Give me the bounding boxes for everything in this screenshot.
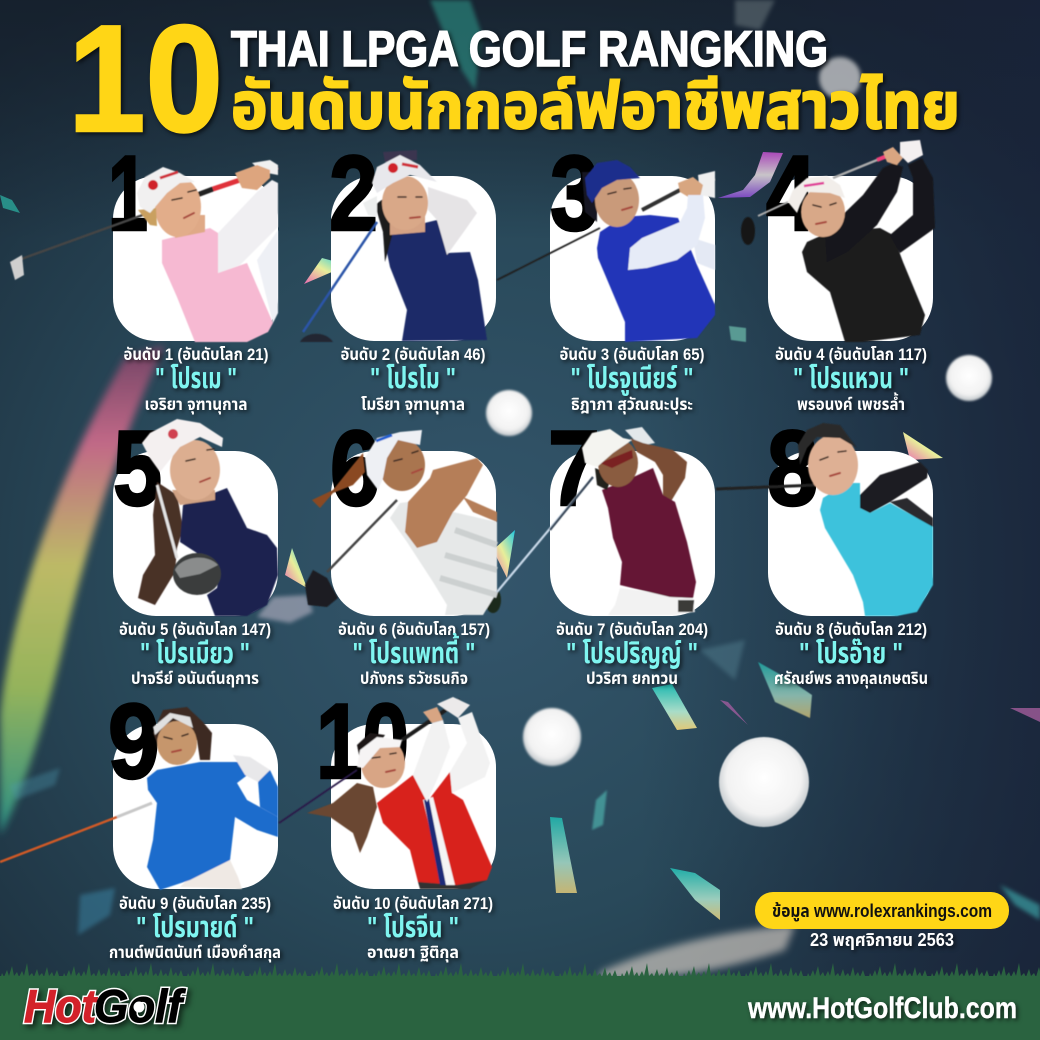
rank number: 5 bbox=[113, 408, 162, 528]
title bbox=[68, 0, 960, 164]
panel: player 9 bbox=[0, 681, 278, 890]
photo card bbox=[113, 176, 278, 341]
text: player 10: " โปรจีน " bbox=[367, 912, 459, 944]
rank number: 8 bbox=[767, 408, 818, 528]
logo: HotGolf: Golf bbox=[94, 980, 186, 1032]
text: player 1: อันดับ 1 (อันดับโลก 21) bbox=[124, 345, 268, 364]
rank number: 9 bbox=[108, 681, 160, 801]
panel: player 5 bbox=[113, 408, 278, 616]
text: player 9: อันดับ 9 (อันดับโลก 235) bbox=[119, 894, 271, 913]
text: player 3: อันดับ 3 (อันดับโลก 65) bbox=[560, 345, 704, 364]
rank number: 7 bbox=[548, 408, 600, 528]
text: player 2: โมรียา จุฑานุกาล bbox=[361, 395, 465, 415]
photo card bbox=[331, 176, 496, 341]
text: player 7: " โปรปริญญ์ " bbox=[566, 638, 698, 670]
text: player 1: เอริยา จุฑานุกาล bbox=[144, 395, 248, 415]
player figure bbox=[0, 707, 278, 890]
text: player 2 bbox=[340, 345, 486, 415]
logo: HotGolf: Hot bbox=[24, 980, 98, 1032]
text: player 5 bbox=[119, 620, 271, 688]
text: player 5: " โปรเมียว " bbox=[140, 638, 250, 670]
grass footer bbox=[0, 958, 1040, 1040]
logo: HotGolf: Hot bbox=[24, 980, 98, 1032]
player figure bbox=[497, 160, 715, 342]
player figure bbox=[741, 140, 935, 342]
text: player 7: อันดับ 7 (อันดับโลก 204) bbox=[556, 620, 708, 639]
panel: player 7 bbox=[497, 408, 715, 616]
golf balls bbox=[486, 57, 992, 827]
logo: HotGolf: Golf bbox=[94, 980, 186, 1032]
text: player 4: " โปรแหวน " bbox=[793, 363, 909, 395]
date: 23 พฤศจิกายน 2563 bbox=[810, 930, 954, 950]
photo card bbox=[331, 724, 496, 889]
photo card bbox=[768, 176, 933, 341]
text: player 1: " โปรเม " bbox=[155, 363, 237, 395]
text: player 5: อันดับ 5 (อันดับโลก 147) bbox=[119, 620, 271, 639]
english heading: THAI LPGA GOLF RANGKING bbox=[231, 21, 828, 77]
text: player 6: ปภังกร ธวัชธนกิจ bbox=[360, 669, 468, 688]
text: player 9 bbox=[109, 894, 281, 963]
rank number: 6 bbox=[330, 408, 380, 528]
photo card bbox=[331, 451, 496, 616]
text: player 3: " โปรจูเนียร์ " bbox=[570, 363, 694, 396]
source text: ข้อมูล www.rolexrankings.com bbox=[772, 901, 992, 922]
panel: player 1 bbox=[10, 133, 278, 342]
text: player 7 bbox=[556, 620, 708, 688]
text: player 9: กานต์พนิตนันท์ เมืองคำสกุล bbox=[109, 943, 281, 963]
text: player 5: ปาจรีย์ อนันต์นฤการ bbox=[131, 669, 259, 688]
player figure bbox=[305, 430, 501, 615]
photo card bbox=[113, 451, 278, 616]
yellow pill bbox=[755, 892, 1009, 929]
text: player 4 bbox=[775, 345, 927, 414]
panel: player 2 bbox=[300, 133, 496, 342]
panel: player 10 bbox=[279, 681, 496, 889]
text: player 3 bbox=[560, 345, 704, 415]
text: player 6: อันดับ 6 (อันดับโลก 157) bbox=[338, 620, 490, 639]
photo card bbox=[768, 451, 933, 616]
text: player 3: ธิฎาภา สุวัณณะปุระ bbox=[571, 395, 693, 415]
text: player 10: อันดับ 10 (อันดับโลก 271) bbox=[333, 894, 493, 913]
player figure bbox=[716, 423, 933, 616]
light flare bbox=[600, 925, 795, 980]
text: player 9: " โปรมายด์ " bbox=[136, 912, 254, 944]
panel: player 4 bbox=[741, 133, 935, 342]
text: player 6 bbox=[338, 620, 490, 688]
panel: player 6 bbox=[305, 408, 501, 616]
text: player 8: อันดับ 8 (อันดับโลก 212) bbox=[775, 620, 927, 639]
photo card bbox=[550, 451, 715, 616]
rank number: 4 bbox=[766, 133, 816, 253]
text: player 10 bbox=[333, 894, 493, 963]
text: player 2: อันดับ 2 (อันดับโลก 46) bbox=[340, 345, 486, 364]
photo card bbox=[113, 724, 278, 889]
rainbow streak bbox=[0, 345, 165, 835]
player figure bbox=[497, 427, 696, 615]
player figure bbox=[279, 697, 492, 889]
text: player 4: พรอนงค์ เพชรล้ำ bbox=[797, 392, 905, 414]
panel: player 3 bbox=[497, 133, 715, 342]
text: player 8: " โปรอ๊าย " bbox=[799, 638, 903, 670]
source callout bbox=[755, 892, 1009, 950]
rank number: 3 bbox=[550, 133, 599, 253]
rank number: 2 bbox=[329, 133, 378, 253]
text: player 6: " โปรแพทตี้ " bbox=[352, 632, 476, 670]
text: player 8 bbox=[774, 620, 928, 689]
rank number: 10 bbox=[316, 681, 409, 801]
player figure bbox=[10, 160, 278, 342]
text: player 4: อันดับ 4 (อันดับโลก 117) bbox=[775, 345, 927, 364]
text: player 8: ศรัณย์พร ลางคุลเกษตริน bbox=[774, 669, 928, 689]
rank number: 1 bbox=[108, 133, 148, 253]
text: player 2: " โปรโม " bbox=[370, 363, 456, 395]
panel: player 8 bbox=[716, 408, 933, 616]
text: player 10: อาฒยา ฐิติกุล bbox=[367, 943, 459, 963]
player figure bbox=[300, 150, 487, 342]
text: player 7: ปวริศา ยกทวน bbox=[586, 669, 678, 688]
text: player 1 bbox=[124, 345, 268, 415]
player figure bbox=[138, 419, 278, 616]
logo: HotGolf bbox=[24, 980, 186, 1032]
photo card bbox=[550, 176, 715, 341]
thai heading: อันดับนักกอล์ฟอาชีพสาวไทย bbox=[231, 69, 960, 142]
